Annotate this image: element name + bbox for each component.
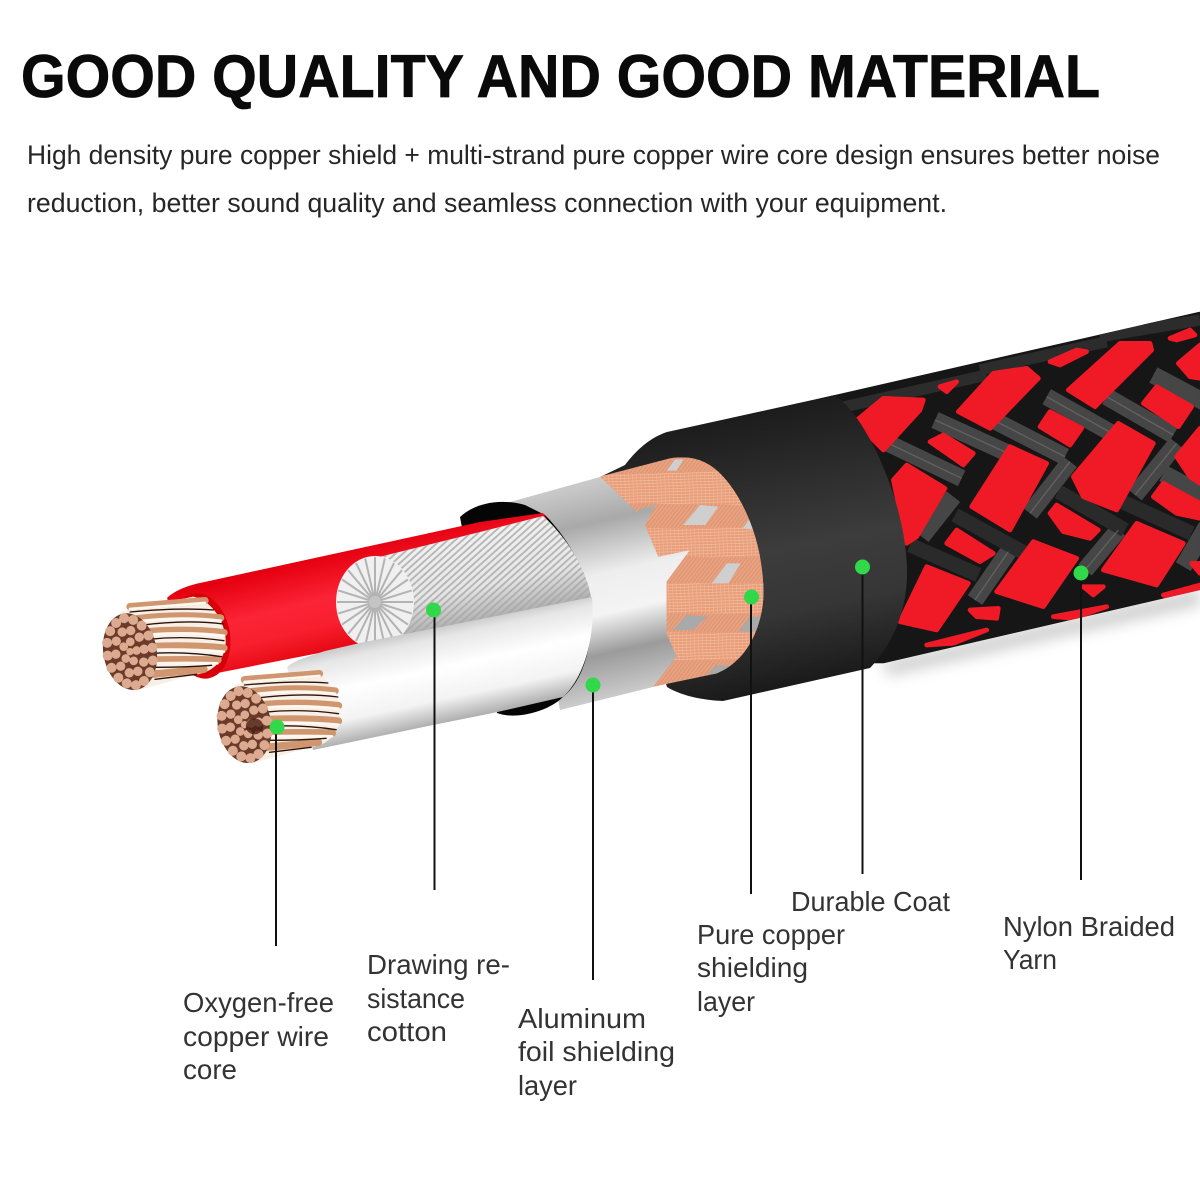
callout: oxygen-free copper wire core	[183, 720, 334, 1085]
callout: drawing resistance cotton: Drawing re-	[367, 949, 510, 980]
callout: aluminum foil shielding layer: Aluminum	[518, 1003, 646, 1034]
callout: nylon braided yarn: Yarn	[1003, 944, 1057, 975]
callout: drawing resistance cotton	[367, 602, 510, 1047]
intro text: High density pure copper shield + multi-strand pure copper wire core design ensures better noise	[27, 140, 1160, 170]
intro text	[27, 140, 1160, 218]
aluminum foil shield	[510, 460, 717, 710]
callout: nylon braided yarn: Nylon Braided	[1003, 911, 1175, 942]
durable coat	[600, 395, 907, 701]
pure copper shield braid	[597, 453, 770, 690]
title: GOOD QUALITY AND GOOD MATERIAL	[21, 43, 1100, 110]
callout: pure copper shielding layer: layer	[697, 986, 755, 1017]
callout: pure copper shielding layer: Pure copper	[697, 919, 845, 950]
white insulated wire	[287, 597, 593, 750]
callout: pure copper shielding layer	[697, 590, 845, 1017]
copper core: white wire	[210, 670, 340, 768]
nylon braided jacket	[817, 300, 1200, 667]
drawing-resistance cotton	[336, 516, 592, 660]
callout: drawing resistance cotton: cotton	[367, 1016, 447, 1047]
callout: oxygen-free copper wire core: copper wire	[183, 1021, 329, 1052]
callout: aluminum foil shielding layer: layer	[518, 1070, 577, 1101]
callout: drawing resistance cotton: sistance	[367, 983, 465, 1014]
copper core: red wire	[96, 597, 226, 695]
callout: oxygen-free copper wire core: Oxygen-free	[183, 987, 334, 1018]
callout: durable coat: Durable Coat	[791, 886, 950, 917]
callout: aluminum foil shielding layer: foil shielding	[518, 1036, 675, 1067]
cable illustration	[96, 300, 1200, 768]
callout: nylon braided yarn	[1003, 566, 1175, 975]
cable drop shadow	[880, 588, 1200, 676]
red insulated wire	[165, 513, 560, 683]
cotton end face	[336, 556, 414, 648]
inner foil opening	[460, 502, 592, 716]
callout: oxygen-free copper wire core: core	[183, 1054, 237, 1085]
callout: durable coat	[791, 560, 950, 917]
callout: aluminum foil shielding layer	[518, 678, 675, 1101]
callout: pure copper shielding layer: shielding	[697, 952, 808, 983]
intro text: reduction, better sound quality and seamless connection with your equipment.	[27, 188, 947, 218]
